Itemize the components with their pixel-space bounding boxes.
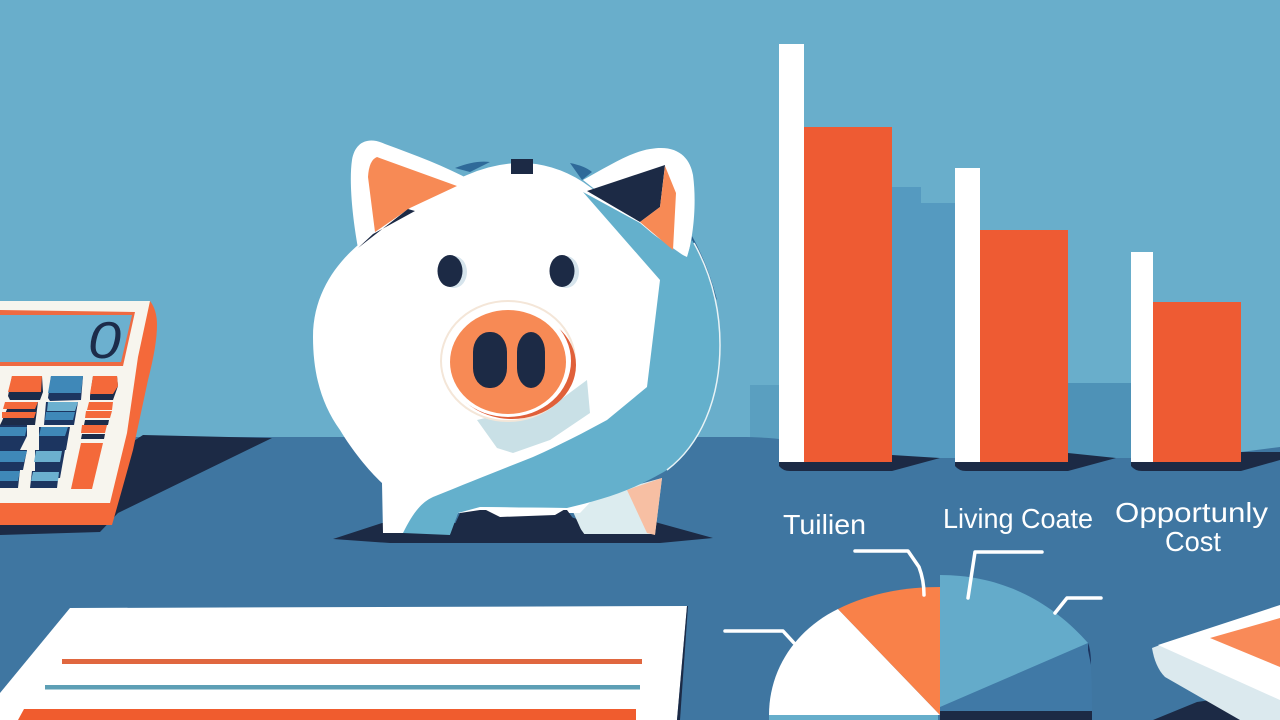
pig band outline [667, 243, 720, 470]
bar chart [779, 44, 1280, 471]
leader lines [725, 551, 1101, 643]
pig legs gap [450, 510, 585, 535]
label: opportunity cost: Opportunly [1115, 497, 1268, 528]
label: opportunity cost: Cost [1165, 526, 1221, 557]
pig left eye [438, 255, 467, 288]
pie dark base [940, 711, 1092, 720]
document line teal [45, 685, 640, 690]
pig snout [441, 301, 576, 421]
calculator keys [0, 376, 118, 489]
calculator cast shadow [0, 435, 272, 535]
pig left ear [351, 141, 472, 248]
pig belly highlight [480, 507, 567, 517]
pig right ear [583, 148, 695, 258]
piggy bank [313, 141, 720, 543]
bar group: living costs [955, 168, 1116, 471]
pie blue wedge [940, 575, 1088, 707]
bar group: opportunity cost [1131, 252, 1280, 471]
calculator display [0, 310, 135, 370]
bar group: tuition [779, 44, 940, 471]
pig snout shadow [477, 380, 590, 453]
document right edge [677, 606, 688, 720]
label: living costs: Living Coate [943, 503, 1093, 534]
document sheet [0, 606, 687, 720]
pig far side dark edge [690, 236, 717, 300]
calculator body side [0, 301, 157, 525]
document [0, 606, 688, 720]
calculator face [0, 301, 150, 503]
calculator [0, 301, 272, 535]
pie chart [769, 575, 1092, 720]
document block orange [18, 709, 636, 720]
document line orange [62, 659, 642, 664]
pig ground shadow [333, 513, 713, 543]
display digit: 0 [88, 312, 121, 370]
pie lower right wedge [940, 643, 1092, 711]
floor [0, 437, 1280, 720]
pig right eye [550, 255, 579, 288]
pie teal base [769, 715, 938, 720]
pig body [313, 163, 690, 533]
bar chart backdrop shadows [750, 187, 1132, 470]
pig right leg [570, 478, 662, 535]
label: tuition: Tuilien [783, 509, 866, 540]
pie white wedge [769, 609, 940, 715]
pig coin slot [511, 159, 533, 174]
pig nostrils [473, 332, 545, 388]
label: opportunity cost [1115, 497, 1268, 557]
pie orange wedge [838, 587, 940, 715]
tablet screen [1210, 618, 1280, 667]
tablet shadow [1153, 690, 1280, 720]
tablet top surface [1158, 605, 1280, 700]
tablet side [1152, 645, 1280, 720]
pig blue body band [403, 192, 720, 535]
tablet [1152, 605, 1280, 720]
pig top dark slivers [455, 162, 592, 180]
